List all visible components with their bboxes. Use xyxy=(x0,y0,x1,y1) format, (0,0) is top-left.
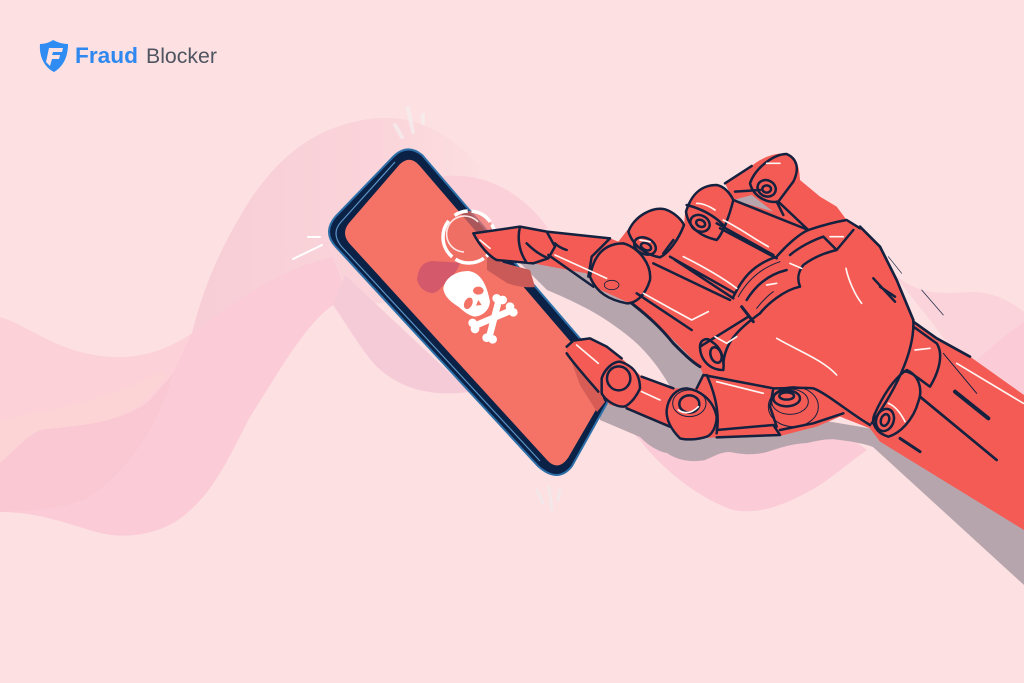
fourth knuckle xyxy=(750,154,797,202)
wave: left upper ribbon xyxy=(0,317,192,463)
shadow: thumb and forearm xyxy=(600,400,1024,585)
forearm lines xyxy=(913,322,970,357)
phone screen xyxy=(345,160,606,466)
wave: main ribbon xyxy=(0,257,345,536)
wave: upper crest ribbon xyxy=(192,118,480,340)
logo xyxy=(40,40,217,72)
crossbones xyxy=(468,294,518,344)
thumb base joint xyxy=(773,390,800,406)
finger shadow on screen xyxy=(487,253,535,287)
knuckle centre xyxy=(604,280,619,290)
background waves xyxy=(0,118,1024,536)
wrist joint xyxy=(903,327,940,387)
skull eyes and nose xyxy=(462,287,484,310)
thumb middle joint xyxy=(667,388,717,439)
hand side scratches xyxy=(888,257,943,315)
palm outer edge xyxy=(860,227,913,320)
touch ring inner xyxy=(447,216,478,252)
fingertip-side knuckle row xyxy=(733,220,860,313)
hand shadow xyxy=(520,250,1024,585)
ink outlines xyxy=(473,154,997,460)
index fingertip xyxy=(473,227,555,263)
wave: peach highlight xyxy=(0,370,165,463)
icon: skull and crossbones xyxy=(443,271,518,344)
thumb base xyxy=(697,375,870,437)
icon: shield xyxy=(40,40,68,72)
skull xyxy=(443,271,490,317)
second knuckle xyxy=(628,209,684,257)
lower knuckle xyxy=(700,317,748,370)
wordmark: Blocker: Blocker xyxy=(146,44,217,68)
phone body xyxy=(329,149,614,475)
index knuckle xyxy=(590,243,650,303)
wave: right corner fold xyxy=(965,322,1024,405)
third knuckle xyxy=(686,185,733,240)
thumb tip xyxy=(567,338,622,392)
white highlights xyxy=(480,163,1023,422)
index middle segment xyxy=(547,232,610,287)
wave: lower right ribbon xyxy=(600,400,867,511)
thumb shadow on screen xyxy=(568,352,605,412)
wave: right side ribbon xyxy=(890,270,1024,380)
screen stain xyxy=(417,261,460,293)
smartphone xyxy=(329,149,614,475)
phone edge highlight xyxy=(336,162,540,461)
wordmark: Fraud: Fraud xyxy=(75,43,138,68)
gray gap between fingers xyxy=(733,195,773,212)
finger bars xyxy=(637,200,808,330)
shadow: index finger xyxy=(520,250,720,400)
hand silhouette xyxy=(473,154,1024,530)
robot hand xyxy=(473,154,1024,530)
touch ring outer xyxy=(443,211,495,263)
icon: impact sparks xyxy=(293,108,560,510)
wave: crest behind phone xyxy=(430,176,548,270)
thumb knuckle xyxy=(602,362,640,407)
wave: lower left dark fold xyxy=(0,373,173,512)
wave: fold behind phone xyxy=(333,275,470,393)
thumb segment xyxy=(627,377,673,427)
